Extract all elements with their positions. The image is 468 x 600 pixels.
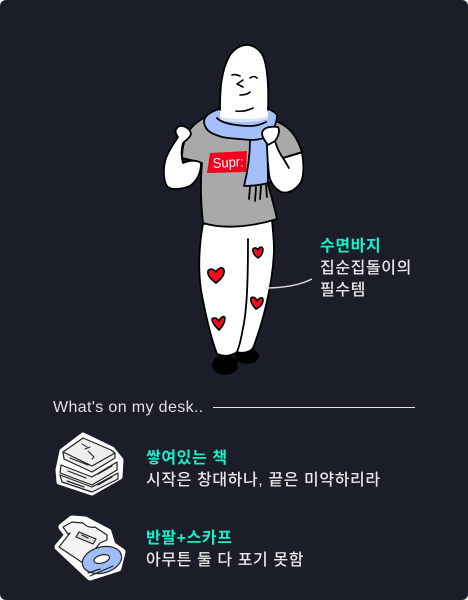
item: books: 쌓여있는 책 bbox=[146, 450, 228, 467]
supreme logo: Supr: bbox=[212, 153, 244, 171]
item: books: 시작은 창대하나, 끝은 미약하리라 bbox=[146, 472, 381, 489]
leader line bbox=[265, 278, 312, 289]
t-shirt bbox=[182, 118, 302, 227]
character illustration bbox=[163, 44, 304, 375]
right hand bbox=[262, 127, 279, 145]
sleep pants bbox=[199, 220, 274, 356]
scarf fringe bbox=[249, 185, 267, 201]
callout: sleep pants bbox=[320, 238, 412, 299]
item: t-shirt and scarf: 반팔+스카프 bbox=[146, 530, 233, 547]
left arm bbox=[164, 126, 201, 189]
shoes bbox=[213, 349, 258, 374]
right arm bbox=[266, 140, 303, 193]
head bbox=[220, 45, 268, 119]
callout: sleep pants: 수면바지 bbox=[320, 238, 381, 255]
item: books bbox=[146, 449, 381, 489]
item: t-shirt and scarf bbox=[146, 530, 304, 569]
scarf inner fold bbox=[220, 116, 268, 122]
scarf bbox=[204, 108, 277, 186]
callout: sleep pants: 필수템 bbox=[320, 282, 366, 299]
callout: sleep pants: 집순집돌이의 bbox=[320, 260, 412, 277]
item: t-shirt and scarf: 아무튼 둘 다 포기 못함 bbox=[146, 552, 304, 569]
hearts bbox=[208, 247, 263, 330]
supreme logo bbox=[207, 151, 247, 173]
heading: what's on my desk: What's on my desk.. bbox=[53, 399, 204, 416]
face bbox=[232, 75, 257, 111]
